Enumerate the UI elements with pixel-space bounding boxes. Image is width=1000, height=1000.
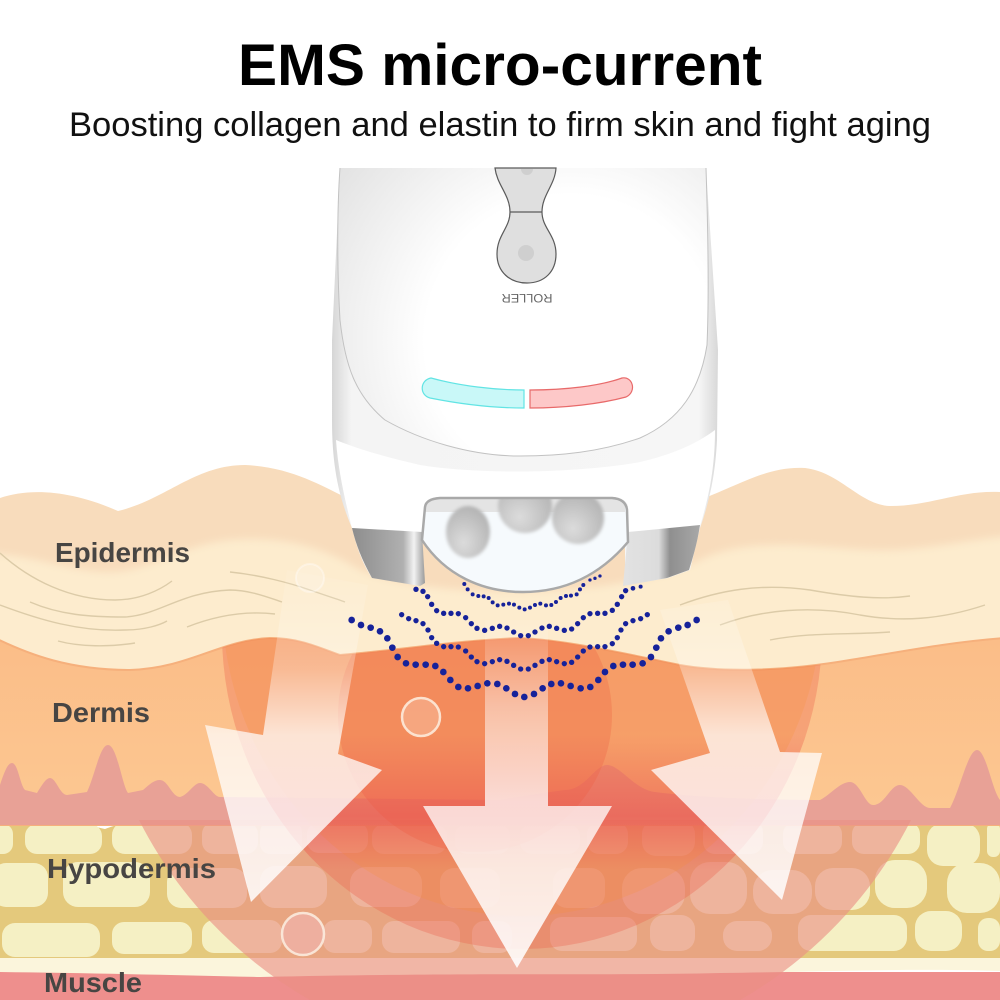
epidermis outer layer [0, 465, 1000, 680]
skin cross-section [0, 465, 1000, 1000]
wave 4 [348, 617, 700, 700]
wave 2 [413, 585, 643, 638]
arrow: centre [423, 620, 612, 968]
ROLLER label: ROLLER [502, 291, 552, 303]
subtitle: Boosting collagen and elastin to firm skin and fight aging [69, 106, 931, 144]
inner heat circle [338, 638, 612, 849]
label: Epidermis: Epidermis [55, 537, 190, 568]
shield outline [338, 168, 708, 456]
bubble: middle [402, 698, 440, 736]
dermal papillae [0, 745, 1000, 825]
epidermis cream layer [0, 535, 1000, 680]
wave 3 [399, 612, 650, 672]
label: Dermis: Dermis [52, 697, 150, 728]
roller window [420, 496, 630, 594]
orange inner band [226, 638, 816, 914]
device [332, 168, 718, 592]
arrow: left [205, 570, 382, 902]
outer heat circle [139, 820, 911, 977]
label: Hypodermis: Hypodermis [47, 853, 216, 884]
device shield face [338, 168, 708, 456]
wave 1 [462, 574, 602, 611]
hypodermis fat layer [0, 814, 1000, 958]
arrow: right [651, 600, 822, 900]
red core band [304, 751, 800, 856]
micro-current dot waves [348, 574, 700, 700]
bubble: upper [296, 564, 324, 592]
fat cells [0, 820, 1000, 957]
bubble: lower [282, 913, 324, 955]
label: Muscle: Muscle [44, 967, 142, 998]
middle heat circle [222, 638, 820, 949]
device lower collar [336, 430, 715, 532]
LED bar: red [530, 378, 633, 408]
red heat overlay circles [139, 638, 911, 977]
chrome side: right [623, 525, 700, 586]
dermis layer [0, 638, 1000, 825]
muscle layer [0, 972, 1000, 1000]
LED bar: cyan [422, 378, 524, 408]
title: EMS micro-current [238, 33, 762, 98]
selector button [495, 168, 556, 283]
white fascia band [0, 957, 1000, 977]
device body [332, 168, 718, 585]
chrome side: left [352, 528, 425, 586]
wrinkle lines [0, 553, 985, 646]
